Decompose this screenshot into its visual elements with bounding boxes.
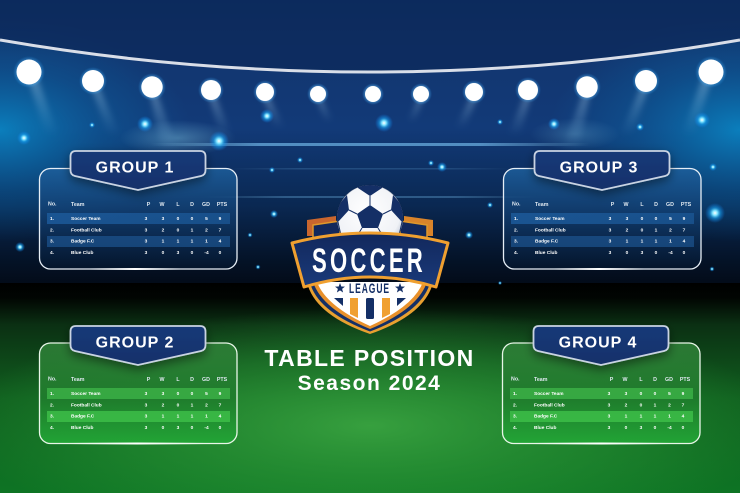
table: group 3: 1 xyxy=(655,228,658,234)
panel: group 3 xyxy=(504,151,701,270)
banner: group 2: GROUP 2 xyxy=(96,334,174,352)
table: group 3: 2 xyxy=(626,228,629,234)
panel card 2 xyxy=(40,343,237,444)
badge subtitle: LEAGUE: LEAGUE xyxy=(349,281,390,296)
table: group 2: 0 xyxy=(177,391,180,397)
table: group 3: 3 xyxy=(626,216,629,222)
table: group 1: 3. xyxy=(50,239,54,245)
table: group 4: No. xyxy=(511,376,520,382)
light streaks xyxy=(150,143,590,198)
table: group 4: 1. xyxy=(513,391,517,397)
table: group 4: Blue Club xyxy=(534,425,556,431)
table: group 4: 2 xyxy=(625,402,628,408)
table: group 2: 3 xyxy=(145,391,148,397)
shield navy ring xyxy=(311,286,429,332)
table: group 3: Football Club xyxy=(535,228,566,234)
table: group 1: 1 xyxy=(191,228,194,234)
table: group 1: 3 xyxy=(145,228,148,234)
table: group 1: 1 xyxy=(162,239,165,245)
table: group 1: 4. xyxy=(50,250,54,256)
panel glow line 2 xyxy=(70,442,205,444)
table: group 3: 0 xyxy=(626,250,629,256)
table: group 1: GD xyxy=(202,202,210,208)
table: group 4: 1 xyxy=(640,414,643,420)
table: group 3: D xyxy=(654,202,658,208)
table: group 2: -4 xyxy=(204,425,209,431)
table: group 4: 1 xyxy=(654,402,657,408)
table: group 1: 0 xyxy=(191,250,194,256)
floodlights row xyxy=(13,56,727,105)
table: group 3: 3. xyxy=(514,239,518,245)
table: group 4: 3 xyxy=(608,402,611,408)
panel card 1 xyxy=(40,168,237,269)
table: group 1: No. xyxy=(48,202,57,208)
banner: group 4 xyxy=(534,326,668,365)
table: group 3: 5 xyxy=(669,216,672,222)
table: group 4: 1 xyxy=(668,414,671,420)
table: group 1: 0 xyxy=(177,228,180,234)
table: group 2: P xyxy=(147,377,151,383)
shield inner white xyxy=(317,282,423,326)
panel glow line 3 xyxy=(554,268,644,270)
panel: group 1 xyxy=(40,151,237,270)
table: group 3: 9 xyxy=(683,216,686,222)
table: group 1: 1 xyxy=(191,239,194,245)
banner: group 1: GROUP 1 xyxy=(96,160,174,176)
right fan of light xyxy=(530,118,620,150)
table: group 4: PTS xyxy=(680,377,691,383)
table: group 3: P xyxy=(611,202,615,208)
badge back tabs xyxy=(307,216,433,240)
table: group 4: 0 xyxy=(625,425,628,431)
subtitle: Season 2024: Season 2024 xyxy=(298,372,441,395)
table: group 4: 5 xyxy=(668,391,671,397)
table: group 1: Team xyxy=(71,202,85,208)
banner: group 2 xyxy=(70,326,206,365)
table: group 4: 3. xyxy=(513,414,517,420)
table: group 1: 2. xyxy=(50,228,54,234)
table: group 4: W xyxy=(622,377,628,383)
table: group 2: 1 xyxy=(177,414,180,420)
table: group 3: 2 xyxy=(669,228,672,234)
table: group 1: 0 xyxy=(191,216,194,222)
table: group 3 xyxy=(511,202,694,256)
table: group 1: 2 xyxy=(162,228,165,234)
table: group 1: 3 xyxy=(145,250,148,256)
stadium sky background xyxy=(0,0,740,285)
table: group 3: Badge F.C xyxy=(535,239,559,245)
table: group 1: 2 xyxy=(205,228,208,234)
table: group 1: L xyxy=(176,202,180,208)
table: group 3: Soccer Team xyxy=(535,216,565,222)
table: group 1: 3 xyxy=(145,216,148,222)
table: group 3: 7 xyxy=(683,228,686,234)
table: group 1: 3 xyxy=(162,216,165,222)
title: TABLE POSITION: TABLE POSITION xyxy=(264,345,475,371)
table: group 3: L xyxy=(640,202,644,208)
badge stars xyxy=(335,283,405,292)
table: group 1: 1. xyxy=(50,216,54,222)
panel card 3 xyxy=(504,168,701,269)
table: group 3: 3 xyxy=(609,216,612,222)
table: group 4: 3 xyxy=(608,425,611,431)
table: group 2: 5 xyxy=(205,391,208,397)
table: group 2: Football Club xyxy=(71,402,102,408)
table: group 2: 4. xyxy=(50,425,54,431)
table: group 3: 0 xyxy=(655,216,658,222)
table: group 2: 0 xyxy=(162,425,165,431)
table: group 2: 1 xyxy=(162,414,165,420)
table: group 3: 3 xyxy=(609,239,612,245)
table: group 4: Soccer Team xyxy=(534,391,564,397)
table: group 1: 0 xyxy=(219,250,222,256)
panel glow line 1 xyxy=(90,268,180,270)
table: group 2: 0 xyxy=(191,425,194,431)
pitch centre glow xyxy=(0,283,740,493)
table: group 1: D xyxy=(190,202,194,208)
table: group 3: -4 xyxy=(668,250,673,256)
table: group 4: 0 xyxy=(682,425,685,431)
table: group 2: 0 xyxy=(219,425,222,431)
table: group 2: 3 xyxy=(145,402,148,408)
left blue floodlight glow xyxy=(0,18,190,242)
table: group 2: 3 xyxy=(145,414,148,420)
table: group 3: 2. xyxy=(514,228,518,234)
shield stripes xyxy=(334,298,406,319)
left fan of light xyxy=(120,120,236,156)
table: group 2: L xyxy=(176,377,180,383)
dark roof band above cable xyxy=(0,0,740,72)
table: group 3: 1 xyxy=(626,239,629,245)
right blue floodlight glow xyxy=(550,18,740,242)
table: group 3: 1 xyxy=(641,239,644,245)
table: group 2: 0 xyxy=(191,391,194,397)
table: group 3: 1. xyxy=(514,216,518,222)
table: group 1: PTS xyxy=(217,202,228,208)
table: group 2: 3. xyxy=(50,414,54,420)
table: group 4: GD xyxy=(665,377,673,383)
table: group 4: L xyxy=(639,377,643,383)
table: group 1: -4 xyxy=(204,250,209,256)
icon: soccer ball xyxy=(336,185,404,233)
badge title: SOCCER: SOCCER xyxy=(312,242,426,280)
table: group 4: 3 xyxy=(608,391,611,397)
table: group 1: Soccer Team xyxy=(71,216,101,222)
table: group 3: 3 xyxy=(609,250,612,256)
table: group 1: Football Club xyxy=(71,228,102,234)
table: group 2: GD xyxy=(202,377,210,383)
table: group 2: 7 xyxy=(219,402,222,408)
table: group 3: 0 xyxy=(683,250,686,256)
table: group 4: 1 xyxy=(654,414,657,420)
table: group 3: Team xyxy=(535,202,549,208)
table: group 4: 2 xyxy=(668,402,671,408)
table: group 3: PTS xyxy=(681,202,692,208)
panel: group 4 xyxy=(502,326,700,444)
panel card 4 xyxy=(502,343,700,444)
table: group 2: Soccer Team xyxy=(71,391,101,397)
table: group 1: 1 xyxy=(177,239,180,245)
table: group 2: Badge F.C xyxy=(71,414,95,420)
table: group 4: 7 xyxy=(682,402,685,408)
table: group 1: P xyxy=(147,202,151,208)
table: group 4: 3 xyxy=(625,391,628,397)
table: group 1: Badge F.C xyxy=(71,239,95,245)
table: group 4: 4. xyxy=(513,425,517,431)
table: group 4: D xyxy=(653,377,657,383)
table: group 4: 0 xyxy=(654,425,657,431)
table: group 2: 3 xyxy=(162,391,165,397)
table: group 4: Badge F.C xyxy=(534,414,558,420)
table: group 1: Blue Club xyxy=(71,250,93,256)
table: group 2: 1 xyxy=(205,414,208,420)
table: group 2 xyxy=(47,376,230,431)
table: group 3: Blue Club xyxy=(535,250,557,256)
table: group 4: 0 xyxy=(640,402,643,408)
table: group 4: -4 xyxy=(667,425,672,431)
table: group 2: 9 xyxy=(219,391,222,397)
table: group 2: 2 xyxy=(162,402,165,408)
table: group 2: 3 xyxy=(145,425,148,431)
panel: group 2 xyxy=(40,326,237,444)
table: group 1: 0 xyxy=(162,250,165,256)
table: group 4: P xyxy=(610,377,614,383)
table: group 4: 0 xyxy=(640,391,643,397)
table: group 4: 0 xyxy=(654,391,657,397)
table: group 1: 5 xyxy=(205,216,208,222)
table: group 1: 7 xyxy=(219,228,222,234)
banner: group 4: GROUP 4 xyxy=(559,334,637,352)
green pitch background xyxy=(0,283,740,493)
table: group 2: D xyxy=(190,377,194,383)
table: group 4: 3 xyxy=(640,425,643,431)
table: group 4: 3 xyxy=(608,414,611,420)
shield orange ring xyxy=(313,282,427,329)
table: group 4: Team xyxy=(534,377,548,383)
table: group 1: 9 xyxy=(219,216,222,222)
shield outer frame xyxy=(308,286,432,334)
table: group 2: 1. xyxy=(50,391,54,397)
table: group 4: 1 xyxy=(625,414,628,420)
table: group 2: No. xyxy=(48,376,57,382)
table: group 3: 0 xyxy=(641,216,644,222)
table: group 2: 2. xyxy=(50,402,54,408)
table: group 1: W xyxy=(160,202,164,208)
panel glow line 4 xyxy=(534,442,669,444)
table: group 2: 4 xyxy=(219,414,222,420)
stadium roof cable xyxy=(0,40,740,72)
table: group 1: 4 xyxy=(219,239,222,245)
table: group 2: 1 xyxy=(191,414,194,420)
table: group 2: PTS xyxy=(217,377,228,383)
banner: group 3: GROUP 3 xyxy=(560,160,638,176)
soccer league badge xyxy=(292,183,448,334)
table: group 2: Blue Club xyxy=(71,425,93,431)
table: group 1 xyxy=(47,202,230,256)
table: group 1: 3 xyxy=(177,250,180,256)
table: group 4: Football Club xyxy=(534,402,565,408)
table: group 4 xyxy=(510,376,693,431)
table: group 3: 3 xyxy=(609,228,612,234)
floodlight beams xyxy=(27,76,713,150)
table: group 2: 1 xyxy=(191,402,194,408)
table: group 3: GD xyxy=(666,202,674,208)
soccer banner band xyxy=(292,233,448,287)
table: group 3: 4. xyxy=(514,250,518,256)
table: group 2: 0 xyxy=(177,402,180,408)
table: group 3: 0 xyxy=(641,228,644,234)
table: group 4: 2. xyxy=(513,402,517,408)
table: group 2: W xyxy=(160,377,164,383)
bokeh sparkles xyxy=(15,109,725,285)
table: group 3: 0 xyxy=(655,250,658,256)
table: group 4: 4 xyxy=(682,414,685,420)
table: group 3: 3 xyxy=(641,250,644,256)
table: group 2: Team xyxy=(71,377,85,383)
table: group 3: W xyxy=(624,202,628,208)
table: group 3: No. xyxy=(512,202,521,208)
table: group 2: 2 xyxy=(205,402,208,408)
table: group 1: 0 xyxy=(177,216,180,222)
table: group 3: 1 xyxy=(655,239,658,245)
table: group 1: 1 xyxy=(205,239,208,245)
banner: group 3 xyxy=(534,151,670,190)
table: group 4: 9 xyxy=(682,391,685,397)
table: group 3: 4 xyxy=(683,239,686,245)
table: group 3: 1 xyxy=(669,239,672,245)
table: group 2: 3 xyxy=(177,425,180,431)
banner: group 1 xyxy=(70,151,206,190)
table: group 1: 3 xyxy=(145,239,148,245)
